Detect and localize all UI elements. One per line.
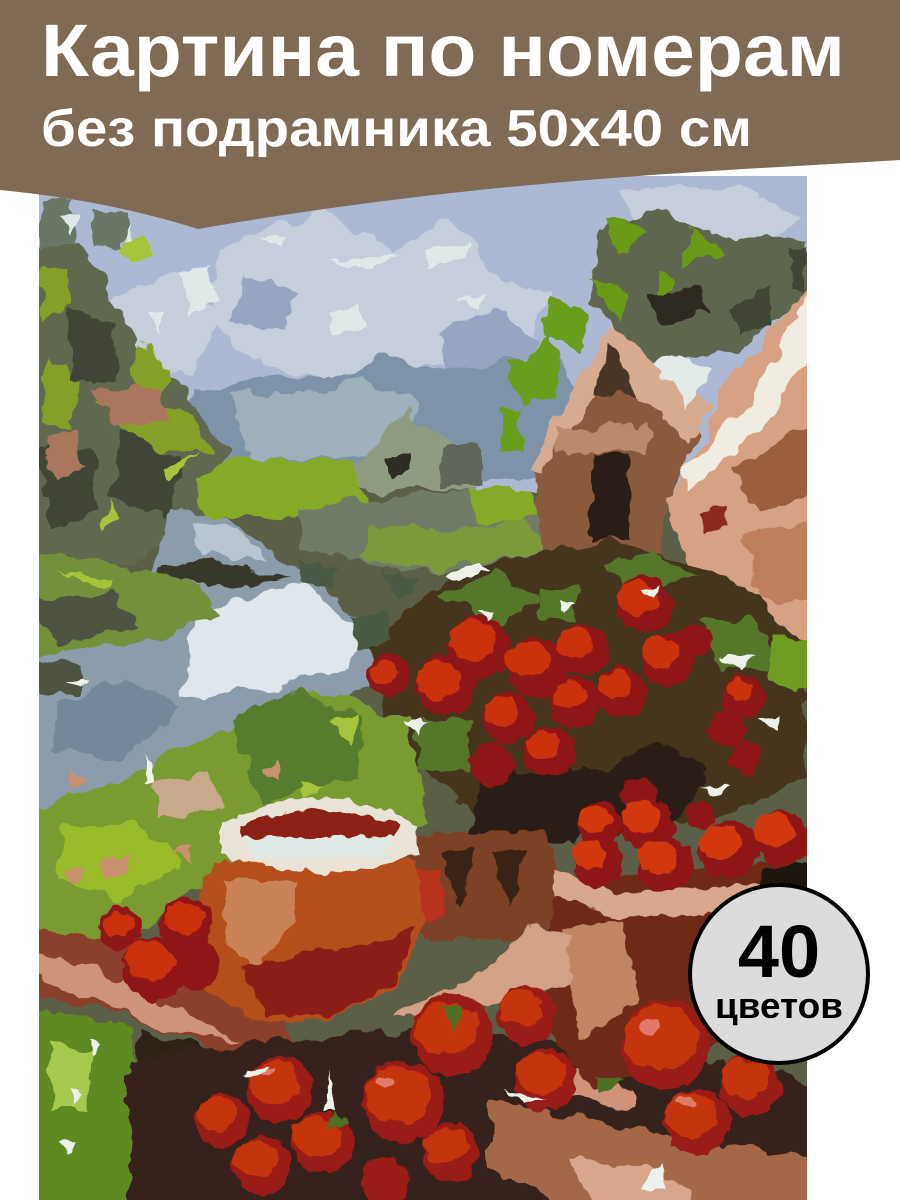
badge: 40 colours: 40 bbox=[738, 910, 820, 993]
subtitle: без подрамника 50х40 см bbox=[41, 100, 752, 158]
painted flecks bbox=[55, 213, 805, 1190]
upper right foliage bbox=[500, 210, 810, 450]
distant blue hills bbox=[190, 350, 580, 480]
tomatoes on the plant bbox=[366, 577, 766, 787]
tomatoes on the table bbox=[99, 898, 219, 1000]
wooden house bbox=[530, 324, 715, 556]
tree mass on the left bbox=[39, 242, 232, 566]
badge: 40 colours bbox=[690, 885, 868, 1063]
bottom left green bbox=[39, 1008, 136, 1200]
top left sky-tree flecks bbox=[40, 195, 125, 250]
title: Картина по номерам bbox=[41, 9, 845, 92]
jug behind the pot bbox=[405, 830, 565, 940]
woven basket bbox=[390, 860, 825, 1090]
painting: village landscape with tomatoes bbox=[10, 160, 840, 1200]
banner bbox=[0, 0, 900, 229]
foreground grass bbox=[39, 687, 428, 940]
tomatoes in the basket bbox=[572, 778, 810, 893]
foreground tomatoes bbox=[195, 986, 781, 1200]
river bbox=[10, 510, 380, 810]
tomato plant foliage bbox=[370, 540, 810, 850]
meadow bbox=[195, 460, 365, 520]
badge: 40 colours: цветов bbox=[715, 985, 843, 1026]
sky with clouds bbox=[20, 160, 830, 490]
left river bank bbox=[20, 550, 220, 655]
clay pot bbox=[185, 798, 425, 1020]
haystack bbox=[666, 290, 807, 640]
wooden table bbox=[20, 930, 340, 1200]
dark lower ground bbox=[130, 1030, 830, 1200]
far house bbox=[355, 410, 480, 490]
